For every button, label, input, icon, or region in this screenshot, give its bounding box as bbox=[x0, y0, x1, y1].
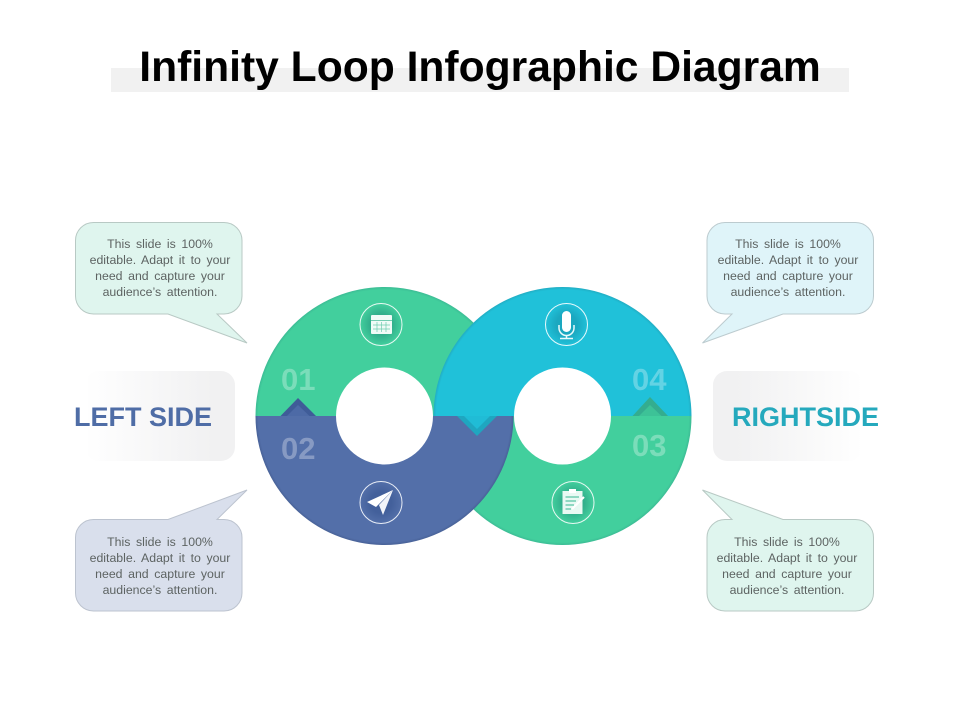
callout: top right: This slide is 100% bbox=[735, 237, 841, 251]
segment 02: left lower blue bbox=[256, 416, 514, 545]
callout: top right: editable. Adapt it to your bbox=[718, 253, 858, 267]
infinity loop diagram bbox=[256, 287, 692, 545]
callout: bottom right: audience’s attention. bbox=[730, 583, 844, 597]
callout: bottom right: need and capture your bbox=[722, 567, 852, 581]
title: Infinity Loop Infographic Diagram bbox=[139, 43, 821, 91]
callout: bottom left: audience’s attention. bbox=[103, 583, 217, 597]
callout: top right: audience’s attention. bbox=[731, 285, 845, 299]
callout: bottom left: need and capture your bbox=[95, 567, 225, 581]
panel: left side label: LEFT SIDE bbox=[74, 402, 212, 432]
number 04: 04 bbox=[632, 362, 667, 397]
icon: clipboard with pencil bbox=[552, 482, 594, 524]
number 03: 03 bbox=[632, 428, 666, 463]
callout: bottom left: This slide is 100% bbox=[107, 535, 213, 549]
callout: bottom right bbox=[702, 490, 874, 611]
callout: top right: need and capture your bbox=[723, 269, 853, 283]
callout: bottom right: This slide is 100% bbox=[734, 535, 840, 549]
callout: top right bbox=[702, 222, 874, 343]
callout: bottom right: editable. Adapt it to your bbox=[717, 551, 857, 565]
callout: bottom left bbox=[76, 490, 247, 611]
number 01: 01 bbox=[281, 362, 315, 397]
icon: calendar bbox=[360, 304, 402, 346]
chevron: cyan on blue bbox=[457, 416, 497, 436]
segment 01: left upper green bbox=[256, 287, 514, 416]
chevron: green on cyan bbox=[632, 397, 668, 416]
segment 03: right lower green bbox=[434, 416, 692, 545]
panel: right side label bbox=[713, 371, 879, 461]
number 02: 02 bbox=[281, 431, 315, 466]
callout: top left: This slide is 100% bbox=[107, 237, 213, 251]
segment 04: right upper cyan bbox=[434, 287, 692, 416]
callout: top left: need and capture your bbox=[95, 269, 225, 283]
callout: bottom left: editable. Adapt it to your bbox=[90, 551, 230, 565]
chevron: blue on green bbox=[280, 398, 316, 416]
icon: paper plane bbox=[360, 482, 402, 524]
callout: top left: audience’s attention. bbox=[103, 285, 217, 299]
panel: left side label bbox=[74, 371, 235, 461]
callout: top left: editable. Adapt it to your bbox=[90, 253, 230, 267]
panel: right side label: RIGHTSIDE bbox=[732, 402, 879, 432]
icon: microphone bbox=[546, 304, 588, 346]
callout: top left bbox=[76, 222, 247, 343]
